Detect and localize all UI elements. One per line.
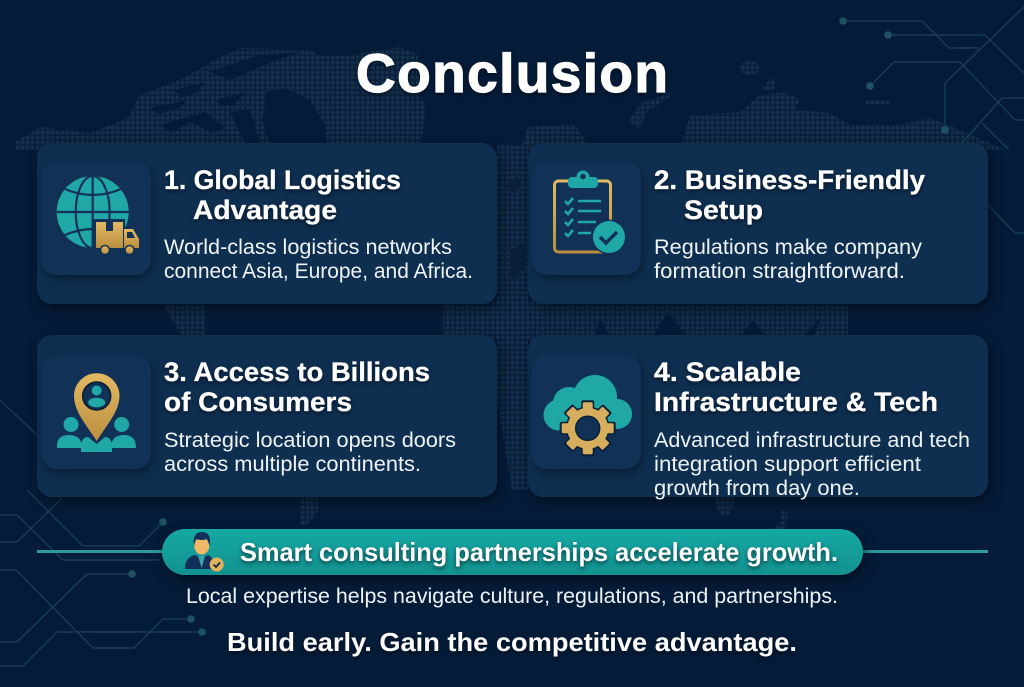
closing line: Build early. Gain the competitive advantage. bbox=[227, 627, 797, 657]
heading: card 4: Infrastructure & Tech bbox=[654, 387, 938, 417]
text: card 4 body: Advanced infrastructure and tech bbox=[654, 429, 970, 452]
text: card 4 body: growth from day one. bbox=[654, 477, 860, 500]
panel: business-friendly setup bbox=[528, 143, 988, 304]
text: card 4 body: integration support efficient bbox=[654, 453, 921, 476]
panel: global logistics advantage bbox=[37, 143, 497, 304]
text: card 4 body bbox=[654, 429, 970, 500]
callout banner bbox=[162, 529, 863, 575]
text: card 2 body bbox=[654, 236, 923, 283]
text: card 3 body: across multiple continents. bbox=[164, 453, 421, 476]
panel: scalable infrastructure and tech bbox=[528, 335, 988, 500]
title: Conclusion bbox=[356, 42, 668, 104]
text: card 1 body: connect Asia, Europe, and Africa. bbox=[164, 260, 473, 283]
heading: card 4: 4. Scalable bbox=[654, 357, 801, 387]
heading: card 3: of Consumers bbox=[164, 387, 352, 417]
panel: access to billions of consumers bbox=[37, 335, 497, 497]
banner text: Smart consulting partnerships accelerate growth. bbox=[240, 537, 838, 567]
supporting text: Local expertise helps navigate culture, regulations, and partnerships. bbox=[186, 585, 838, 608]
heading: card 4 bbox=[654, 357, 938, 417]
text: card 3 body bbox=[164, 429, 456, 476]
heading: card 3 bbox=[164, 357, 430, 417]
text: card 1 body bbox=[164, 236, 473, 283]
heading: card 1: 1. Global Logistics bbox=[164, 165, 401, 195]
heading: card 2: Setup bbox=[684, 195, 763, 225]
text: card 1 body: World-class logistics networks bbox=[164, 236, 452, 259]
icon: globe with delivery truck bbox=[57, 176, 139, 254]
heading: card 2: 2. Business-Friendly bbox=[654, 165, 925, 195]
icon: location pin with people bbox=[57, 373, 136, 452]
world map dotted background bbox=[15, 47, 1005, 538]
divider line behind banner bbox=[37, 550, 988, 553]
icon: clipboard with checkmark bbox=[554, 170, 626, 254]
icon: cloud with gear bbox=[544, 375, 632, 456]
text: card 2 body: Regulations make company bbox=[654, 236, 923, 259]
heading: card 3: 3. Access to Billions bbox=[164, 357, 430, 387]
heading: card 2 bbox=[654, 165, 925, 225]
text: card 3 body: Strategic location opens doors bbox=[164, 429, 456, 452]
heading: card 1 bbox=[164, 165, 401, 225]
heading: card 1: Advantage bbox=[193, 195, 337, 225]
icon: consultant with check badge bbox=[185, 532, 224, 572]
text: card 2 body: formation straightforward. bbox=[654, 260, 905, 283]
